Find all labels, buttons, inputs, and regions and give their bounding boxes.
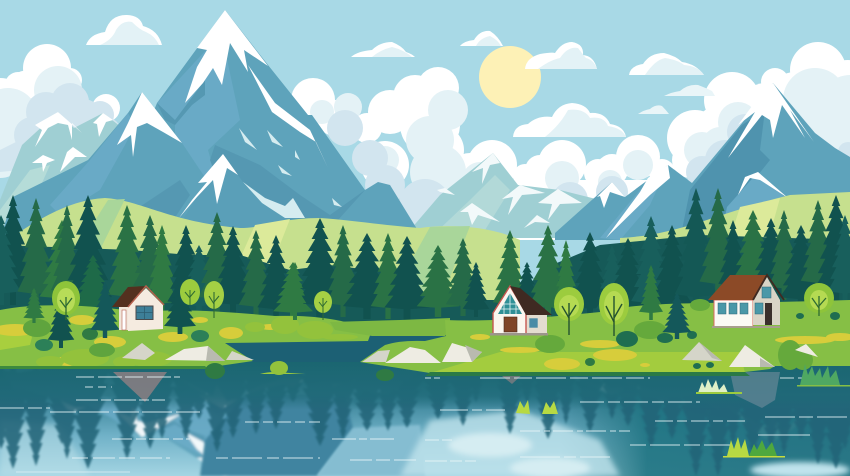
islet in lake — [260, 361, 305, 375]
house: right cottage — [708, 275, 784, 328]
dark bushes — [585, 312, 840, 369]
mountains group — [0, 10, 850, 240]
back forest floor — [0, 235, 850, 330]
reflection: dark main mountain mass — [200, 395, 353, 476]
cloud: right upper — [629, 53, 704, 75]
hills — [0, 192, 850, 320]
tree: centre right one — [554, 287, 584, 335]
mountain: far right peaks — [555, 83, 850, 240]
cloud: thin in front — [664, 85, 715, 96]
snow caps: centre far peaks — [437, 153, 582, 228]
mountain: second peak — [0, 92, 215, 240]
mountain: main peak — [100, 10, 417, 240]
leafy round trees — [52, 279, 834, 336]
far pale mountains: left — [0, 112, 125, 240]
reed clumps in lake — [516, 400, 558, 414]
cloud: top left — [86, 15, 162, 45]
reflection: bright cloud patches — [0, 410, 850, 476]
cloud: below sun — [513, 103, 626, 137]
house: centre chalet — [490, 286, 552, 336]
reflection: mountains — [64, 380, 794, 476]
rocks — [122, 342, 818, 367]
reflection: house right — [730, 372, 780, 408]
tree: third — [314, 291, 332, 320]
snow caps: left far peaks — [32, 112, 113, 172]
back trees — [0, 188, 850, 320]
lake and reflections — [0, 366, 850, 476]
far pale mountains: centre — [410, 153, 600, 238]
snow caps: right peaks — [597, 83, 814, 238]
shrubs — [36, 316, 358, 368]
tree: far left — [52, 281, 80, 320]
reflection: pale water beside mountain — [317, 425, 425, 476]
house: left cottage — [112, 286, 164, 331]
mountain: small front peak — [175, 154, 330, 232]
bank: right shore — [360, 299, 850, 376]
small clouds — [86, 15, 704, 137]
foreground spruces — [23, 262, 692, 348]
lake water — [0, 374, 684, 472]
inlet water behind banks — [200, 328, 500, 373]
water glints — [0, 377, 850, 472]
shrubs — [535, 299, 813, 370]
tree: left by house — [180, 279, 200, 305]
yellow patches — [470, 333, 850, 370]
cloud bank: right — [664, 42, 850, 188]
grass tuft: front — [723, 437, 785, 458]
sun — [479, 46, 541, 108]
snow: second peak — [117, 92, 182, 157]
dark bushes — [23, 319, 209, 357]
yellow patches — [0, 315, 280, 366]
cloud: tiny right — [638, 105, 669, 114]
reflection: trees — [0, 376, 850, 474]
reflection: right darker water — [572, 386, 850, 476]
cloud: beside sun — [525, 42, 597, 69]
conifer forest — [0, 188, 850, 330]
reflection: house centre — [502, 376, 520, 384]
reflection: house left — [113, 372, 167, 402]
bank: strip above inlet — [330, 318, 450, 336]
grass tuft: right shore — [797, 364, 850, 386]
reflection: top dark band — [1, 366, 850, 408]
cloud bank: left — [0, 44, 120, 178]
cloud: upper centre left — [351, 42, 415, 57]
snow: main peak — [185, 10, 342, 207]
bank: left shore — [0, 305, 372, 369]
dark reflected bushes — [205, 363, 394, 381]
tree: second — [204, 281, 224, 318]
cloud: above sun — [460, 31, 503, 46]
grass tuft: pale in lake — [696, 379, 742, 394]
tree: far right — [804, 283, 834, 316]
tree: centre right two — [599, 283, 629, 336]
cloud bank: centre — [291, 67, 675, 240]
